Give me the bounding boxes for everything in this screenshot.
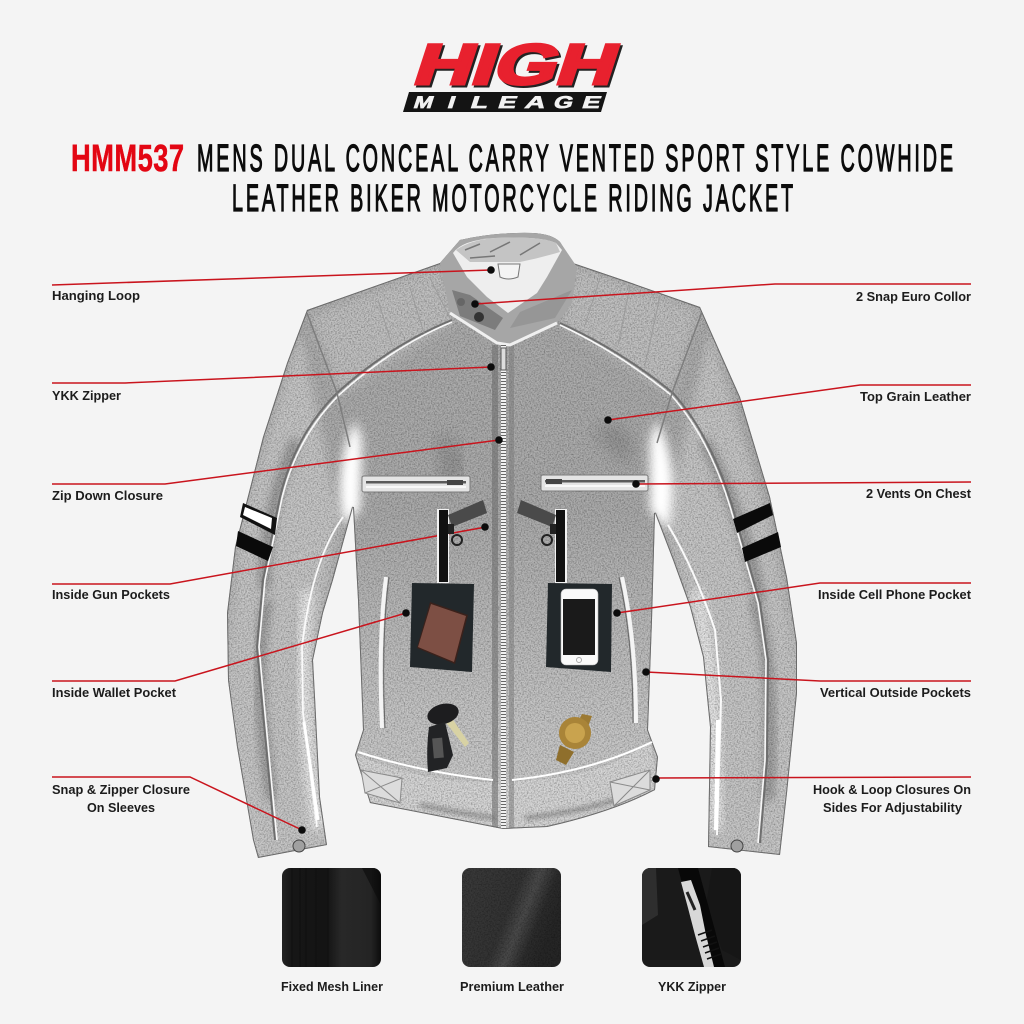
logo bar MILEAGE: I (445, 92, 459, 112)
hem band (356, 744, 656, 828)
swatch: premium leather (462, 868, 561, 967)
callout labels left: Hanging Loop (52, 288, 140, 303)
right inside pocket (546, 583, 612, 672)
chest vent left (362, 476, 470, 492)
leader lines right (475, 284, 971, 778)
logo bar MILEAGE: E (496, 92, 520, 112)
logo bar MILEAGE: L (468, 92, 492, 112)
left sleeve bands (236, 503, 277, 561)
icon: phone (561, 589, 598, 665)
icon: gold watch (556, 714, 592, 765)
swatch labels (281, 979, 726, 994)
grain texture (220, 225, 805, 865)
callout labels left: On Sleeves (87, 800, 155, 815)
zipper shadow bands (492, 345, 498, 830)
logo bar MILEAGE: A (523, 92, 550, 112)
leader lines left (52, 270, 499, 830)
callout labels left: Zip Down Closure (52, 488, 163, 503)
callout labels right: Vertical Outside Pockets (820, 685, 971, 700)
right sleeve bands (733, 503, 781, 562)
neck opening lining (453, 238, 562, 313)
vertical pockets (381, 577, 636, 728)
swatch labels: Fixed Mesh Liner (281, 979, 383, 994)
callout labels left: Inside Wallet Pocket (52, 685, 177, 700)
callout labels right: Sides For Adjustability (823, 800, 963, 815)
logo word HIGH: HIGH (407, 33, 627, 97)
title (71, 138, 953, 220)
icon: left gun (437, 500, 487, 583)
callout labels right: 2 Vents On Chest (866, 486, 972, 501)
title line 1: HMM537 (71, 138, 184, 180)
icon: right gun (517, 500, 567, 583)
armhole highlights (340, 420, 362, 525)
swatch: fixed mesh liner (282, 868, 381, 967)
jacket illustration (220, 225, 805, 865)
callout labels right (813, 289, 972, 815)
raglan seams (257, 278, 768, 843)
callout dots (298, 266, 660, 834)
logo bar MILEAGE: E (580, 92, 604, 112)
logo bar MILEAGE: G (551, 92, 577, 112)
swatch labels: YKK Zipper (658, 979, 726, 994)
logo word HIGH: HIGH (409, 35, 629, 99)
sleeve shading (228, 330, 340, 860)
sleeve zips and snaps (293, 720, 743, 852)
hem adjuster tabs (361, 770, 650, 806)
swatch labels: Premium Leather (460, 979, 564, 994)
collar snap tabs (452, 290, 503, 330)
callout labels left: YKK Zipper (52, 388, 121, 403)
collar tag (498, 264, 520, 279)
title line 1: MENS DUAL CONCEAL CARRY VENTED SPORT STYLE COWHIDE (197, 138, 953, 180)
chest vent right (541, 475, 648, 491)
title line 2: LEATHER BIKER MOTORCYCLE RIDING JACKET (232, 178, 793, 220)
callout labels left (52, 288, 190, 815)
icon: wallet (417, 602, 468, 664)
zipper (501, 345, 506, 828)
left inside pocket (410, 583, 474, 672)
logo bar MILEAGE (403, 92, 607, 112)
silhouette edge (227, 233, 797, 858)
logo bar MILEAGE: M (411, 92, 437, 112)
logo (403, 33, 629, 112)
callout labels right: 2 Snap Euro Collor (856, 289, 971, 304)
callout labels left: Snap & Zipper Closure (52, 782, 190, 797)
callout labels left: Inside Gun Pockets (52, 587, 170, 602)
callout labels right: Top Grain Leather (860, 389, 971, 404)
collar (440, 233, 577, 345)
callout labels right: Hook & Loop Closures On (813, 782, 971, 797)
callout labels right: Inside Cell Phone Pocket (818, 587, 972, 602)
icon: car key (425, 700, 469, 772)
swatch: YKK zipper (642, 868, 741, 967)
hem seam (358, 742, 652, 780)
